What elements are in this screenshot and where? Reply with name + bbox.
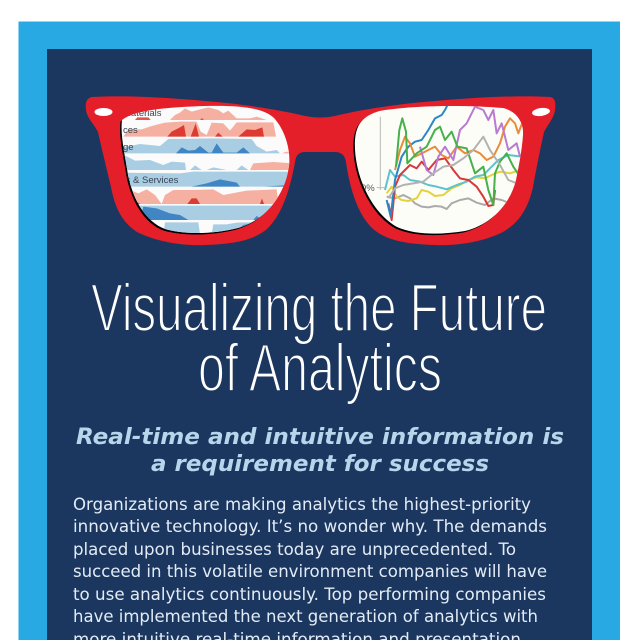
left hinge dot: [94, 108, 112, 116]
chart row labels: ts & Services: [123, 175, 179, 186]
body text: have implemented the next generation of analytics with: [73, 607, 538, 627]
chart axis label: 0%: [361, 183, 375, 194]
subtitle: Real-time and intuitive information is: [76, 425, 564, 450]
chart row labels: Materials: [123, 108, 162, 119]
body text: placed upon businesses today are unprecedented. To: [73, 540, 516, 560]
chart row labels: ge: [123, 142, 134, 153]
right lens shadow: [353, 107, 522, 235]
right hinge dot: [532, 107, 550, 117]
glasses frame: [86, 96, 555, 245]
right lens: line chart: [354, 106, 524, 234]
title: of Analytics: [198, 330, 442, 406]
left lens: horizon chart: [122, 106, 290, 233]
subtitle: [76, 425, 564, 477]
body text: to use analytics continuously. Top performing companies: [73, 585, 546, 605]
chart row labels: [123, 108, 179, 186]
chart row labels: ces: [123, 125, 138, 136]
body text: Organizations are making analytics the highest-priority: [73, 495, 531, 515]
left lens shadow: [120, 107, 288, 235]
panel: navy background: [47, 49, 592, 640]
title: [91, 270, 547, 406]
body text: [73, 495, 547, 640]
body text: innovative technology. It’s no wonder why. The demands: [73, 517, 547, 537]
icon: red glasses: [86, 96, 555, 245]
subtitle: a requirement for success: [151, 452, 489, 477]
body text: succeed in this volatile environment companies will have: [73, 562, 547, 582]
